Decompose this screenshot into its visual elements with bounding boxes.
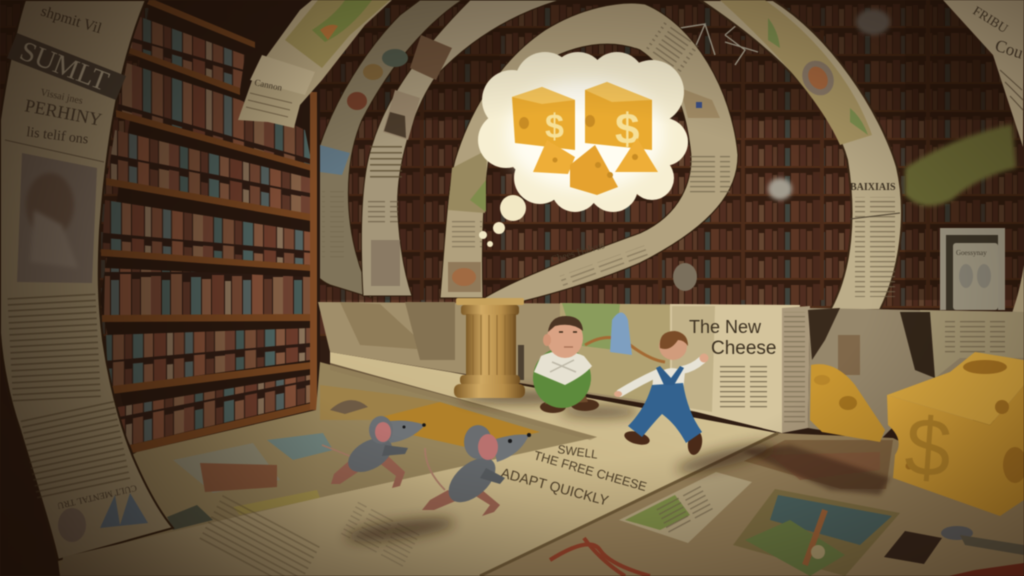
dollar signs xyxy=(545,105,639,154)
floor: maps on left xyxy=(50,362,600,576)
newspaper ribbon: upper right corner: FRIBU xyxy=(970,3,1011,36)
far background props: web, dust balls, bust, green rope xyxy=(673,9,1016,291)
wooden shelves xyxy=(101,0,317,453)
mouse running right xyxy=(422,425,531,516)
cheese wedges xyxy=(533,138,658,195)
book rows xyxy=(102,15,312,445)
map section xyxy=(720,0,872,145)
left large newspaper ribbon: SUMLT xyxy=(15,36,113,98)
character: stout man with crossed arms xyxy=(533,316,599,413)
dollar signs: $ xyxy=(615,105,639,154)
poster on back wall: Goessynay xyxy=(956,249,987,257)
left large newspaper ribbon xyxy=(0,0,173,560)
large dollar cheese block xyxy=(887,352,1024,516)
back wall of bookshelves xyxy=(0,0,1024,340)
torn map ribbon top centre: Cannon xyxy=(254,77,284,93)
column pedestal xyxy=(454,298,525,398)
newspaper ribbon: big right arch xyxy=(700,0,902,310)
newspaper ribbon: second arch with portraits xyxy=(361,0,560,296)
newspaper ribbon: big right arch: BAIXIAIS xyxy=(850,182,896,193)
dark wood floor at left xyxy=(0,420,90,576)
cloud shape xyxy=(478,52,688,212)
floor: maps on right xyxy=(480,433,1024,576)
floor text xyxy=(499,442,648,509)
poster on back wall xyxy=(940,228,1005,310)
floor text: SWELL xyxy=(557,442,599,462)
cheese blocks xyxy=(512,82,652,150)
small upside-down heading and chart xyxy=(56,483,148,542)
shadows xyxy=(344,390,775,547)
the new cheese page xyxy=(670,304,800,433)
the new cheese page: The New xyxy=(689,317,762,337)
mouse running left xyxy=(322,416,426,488)
newspaper ribbon: spiral behind thought bubble xyxy=(440,3,738,302)
thought bubble with cheese xyxy=(478,52,688,247)
torn map ribbon top centre xyxy=(238,0,392,128)
dollar signs: $ xyxy=(545,108,564,146)
left large newspaper ribbon: lis telif ons xyxy=(26,125,89,148)
wall map section xyxy=(560,303,672,405)
newspaper portrait xyxy=(17,153,97,283)
fold and torn wall at right xyxy=(782,306,1024,440)
floor text: THE FREE CHEESE xyxy=(532,448,648,494)
the new cheese page: Cheese xyxy=(711,338,776,359)
left large newspaper ribbon: shpmit Vil xyxy=(39,4,103,37)
newspaper ribbon: far left grey arch xyxy=(310,0,462,298)
floor text: ADAPT QUICKLY xyxy=(499,464,611,509)
bubble trail xyxy=(479,195,526,247)
header band xyxy=(7,33,126,100)
wall silhouette figure xyxy=(518,345,524,380)
newspaper columns of text xyxy=(7,293,101,402)
left large newspaper ribbon: Vissai jnes xyxy=(39,87,84,107)
character: boy in blue overalls xyxy=(614,331,708,456)
large dollar cheese block: $ xyxy=(902,401,954,495)
small upside-down heading and chart: CULT MENTAL TRU xyxy=(56,483,138,511)
left large newspaper ribbon: PERHINY xyxy=(23,95,104,130)
newspaper ribbon: upper right corner xyxy=(943,0,1024,320)
yellow cheese wedge behind wall xyxy=(810,364,885,442)
newspaper ribbon: spiral behind thought bubble: Chees Halvus xyxy=(550,240,606,266)
cream floor sheet xyxy=(60,352,778,576)
raised stage wall xyxy=(318,302,800,433)
left bookcase xyxy=(100,0,320,453)
